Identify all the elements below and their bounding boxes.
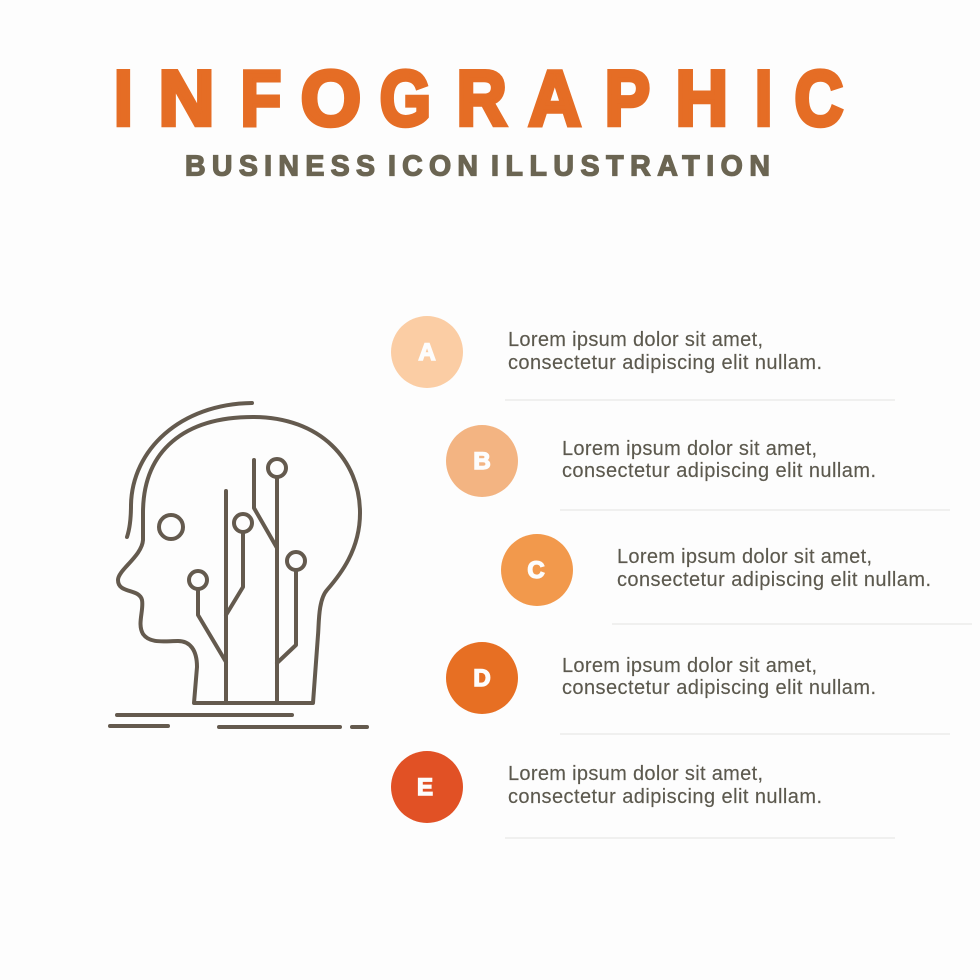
badge C: [501, 534, 573, 606]
item B: [446, 425, 876, 497]
badge B: [446, 425, 518, 497]
middle branch: [226, 532, 243, 615]
item E: [391, 751, 822, 823]
text B: Lorem ipsum dolor sit amet,: [562, 438, 817, 460]
title: H: [676, 55, 728, 141]
text C: consectetur adipiscing elit nullam.: [617, 569, 931, 591]
title: C: [794, 56, 843, 142]
title: [114, 54, 843, 142]
subtitle: ICON: [388, 150, 478, 182]
badge B: B: [473, 448, 491, 475]
text A: consectetur adipiscing elit nullam.: [508, 352, 822, 374]
text C: [617, 546, 931, 591]
item A: [391, 316, 822, 388]
title: O: [301, 56, 361, 142]
text D: Lorem ipsum dolor sit amet,: [562, 655, 817, 677]
text A: [508, 329, 822, 374]
text B: [562, 438, 876, 482]
right circuit: [275, 477, 279, 703]
text E: Lorem ipsum dolor sit amet,: [508, 763, 763, 785]
text A: Lorem ipsum dolor sit amet,: [508, 329, 763, 351]
head outline: [118, 417, 360, 703]
far right branch: [277, 570, 296, 663]
title: I: [114, 56, 133, 142]
title: P: [605, 56, 650, 142]
item D: [446, 642, 876, 714]
subtitle: BUSINESS: [185, 150, 375, 182]
subtitle: [185, 150, 770, 182]
free circle: [159, 515, 183, 539]
title: A: [528, 55, 581, 141]
title: R: [457, 54, 507, 142]
item C: [501, 534, 931, 606]
ground lines: [117, 713, 292, 717]
text D: consectetur adipiscing elit nullam.: [562, 677, 876, 699]
title: I: [755, 54, 772, 142]
text E: [508, 763, 822, 808]
hair arc: [127, 403, 252, 537]
badge E: E: [417, 774, 433, 801]
badge E: [391, 751, 463, 823]
badge A: [391, 316, 463, 388]
title: N: [158, 56, 214, 142]
badge D: [446, 642, 518, 714]
badge C: C: [527, 557, 545, 584]
left circuit: [224, 491, 228, 703]
subtitle: ILLUSTRATION: [491, 150, 770, 182]
badge D: D: [473, 665, 491, 692]
text B: consectetur adipiscing elit nullam.: [562, 460, 876, 482]
title: F: [240, 56, 281, 142]
text E: consectetur adipiscing elit nullam.: [508, 786, 822, 808]
badge A: A: [418, 339, 436, 366]
text C: Lorem ipsum dolor sit amet,: [617, 546, 872, 568]
text D: [562, 655, 876, 699]
title: G: [380, 56, 431, 142]
icon: head with circuit lines: [110, 403, 367, 727]
